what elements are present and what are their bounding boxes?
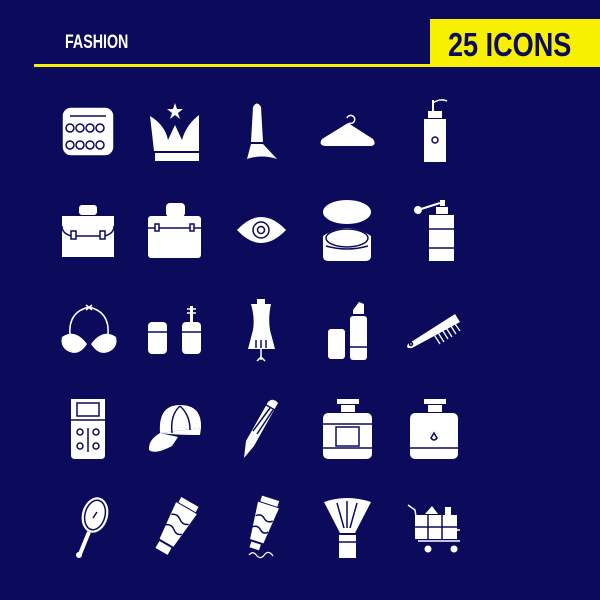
- header underline: [34, 64, 434, 67]
- title: FASHION: [65, 32, 128, 53]
- icon: makeup palette: [71, 399, 105, 459]
- icon: tube squeezed: [244, 495, 281, 552]
- icon: perfume spray: [414, 200, 454, 261]
- icon: bra: [62, 305, 116, 353]
- icon: cream jar: [323, 399, 372, 459]
- icon: perfume jar: [410, 399, 458, 459]
- icon: tube: [151, 496, 200, 557]
- icon: crown: [150, 103, 199, 161]
- icon: toolbox case: [148, 203, 201, 258]
- icon: eyeshadow palette: [62, 107, 114, 156]
- badge: 25 icons: [430, 19, 600, 67]
- icon: compact powder: [323, 200, 371, 261]
- icon: eye: [237, 217, 286, 243]
- icon: comb: [407, 314, 460, 348]
- icon: briefcase: [62, 205, 114, 257]
- badge: 25 icons: 25 ICONS: [448, 26, 571, 63]
- icon: mannequin: [248, 299, 275, 361]
- icon: cap: [149, 405, 201, 452]
- icon: pencil: [244, 400, 278, 458]
- icon: shaving brush: [324, 498, 371, 558]
- icon: makeup brush: [247, 104, 277, 159]
- icon: lipstick: [328, 302, 367, 360]
- icon: shopping cart: [408, 505, 460, 552]
- icon: pump bottle: [424, 100, 447, 162]
- icon: nail polish and mascara: [148, 306, 201, 354]
- icon: hanger: [321, 115, 375, 146]
- icon: hand mirror: [76, 494, 112, 558]
